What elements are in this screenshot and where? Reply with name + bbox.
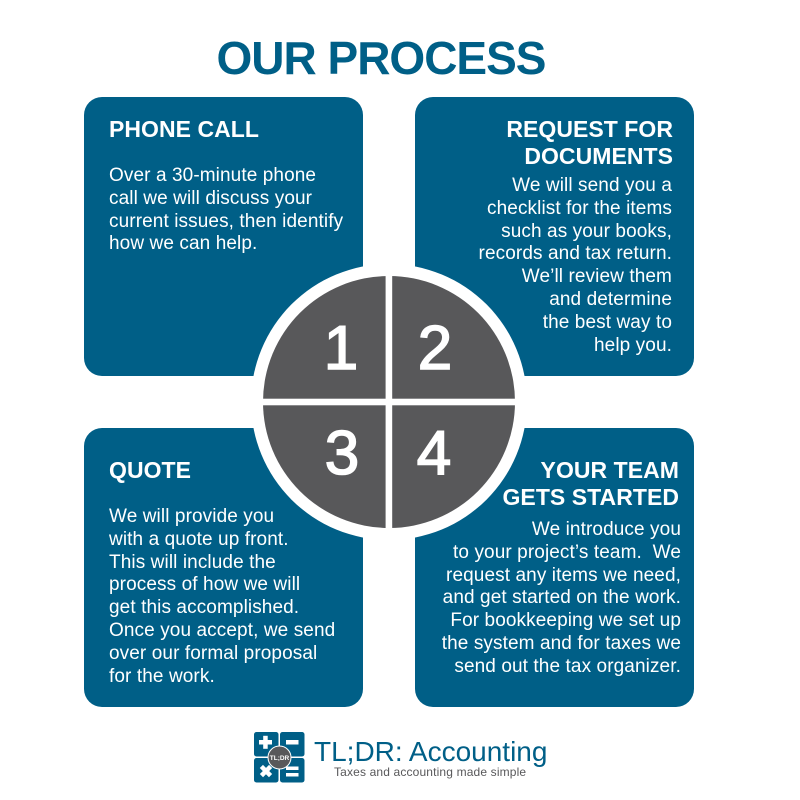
heading: request for documents [506,116,673,169]
heading: your team gets started: YOUR TEAM [541,457,679,483]
center numbered circle: 3 [325,419,359,488]
text: quote: with a quote up front. [109,529,289,550]
logo name: TL;DR: Accounting [314,736,547,767]
text: phone call: call we will discuss your [109,188,312,209]
text: request for documents: records and tax return. [479,243,672,264]
text: request for documents: We will send you a [512,175,672,196]
text: quote: process of how we will [109,574,300,595]
text: request for documents: the best way to [543,312,672,333]
logo: TL;DR Accounting [254,732,547,782]
text: request for documents: checklist for the items [487,198,672,219]
logo tagline: Taxes and accounting made simple [334,765,526,779]
title: OUR PROCESS [217,32,545,84]
heading: your team gets started [502,457,679,510]
panel: quote [84,428,363,707]
icon: calculator: TL;DR [270,755,290,762]
text: your team gets started: the system and for taxes we [442,633,681,654]
text: quote: get this accomplished. [109,597,299,618]
text: quote: This will include the [109,552,276,573]
text: quote: for the work. [109,666,215,687]
center numbered circle: 1 [324,314,358,383]
text: request for documents [479,175,672,356]
text: request for documents: help you. [594,335,672,356]
heading: request for documents: DOCUMENTS [524,143,673,169]
text: your team gets started: and get started on the work. [443,587,681,608]
text: phone call: Over a 30-minute phone [109,165,316,186]
text: quote: over our formal proposal [109,643,317,664]
text: your team gets started: to your project’s team. We [453,542,681,563]
text: request for documents: such as your books, [501,221,672,242]
panel: request for documents [415,97,694,376]
panel: phone call [84,97,363,376]
text: your team gets started: request any items we need, [446,565,681,586]
center numbered circle: 4 [417,419,451,488]
text: your team gets started: We introduce you [532,519,681,540]
panel: your team gets started [415,428,694,707]
text: phone call [109,165,344,254]
text: phone call: how we can help. [109,233,257,254]
text: your team gets started: send out the tax organizer. [454,656,681,677]
text: quote [109,506,335,687]
heading: phone call: PHONE CALL [109,116,259,142]
text: phone call: current issues, then identify [109,211,343,232]
center numbered circle: 2 [418,314,452,383]
text: quote: We will provide you [109,506,274,527]
text: request for documents: and determine [549,289,672,310]
text: request for documents: We’ll review them [522,266,672,287]
heading: your team gets started: GETS STARTED [502,484,679,510]
heading: quote: QUOTE [109,457,191,483]
text: quote: Once you accept, we send [109,620,335,641]
icon: calculator [254,732,304,782]
text: your team gets started [442,519,681,677]
heading: request for documents: REQUEST FOR [506,116,673,142]
text: your team gets started: For bookkeeping we set up [450,610,681,631]
